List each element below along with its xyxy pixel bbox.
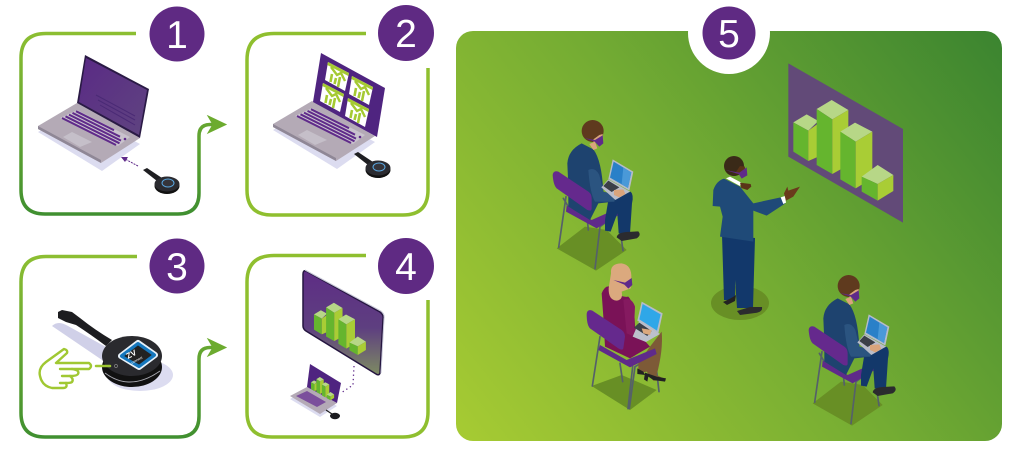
badge: step 2: 2 (395, 13, 417, 56)
badge: step 4 (378, 238, 434, 294)
arrow: dongle to laptop (121, 157, 138, 166)
panel outline: step 1 with arrow (21, 34, 226, 214)
person: seated man bottom right (809, 275, 896, 426)
badge: step 4: 4 (395, 246, 417, 289)
badge: step 2 (378, 5, 434, 61)
badge: step 3 (150, 238, 204, 294)
icon: pointing hand (40, 349, 110, 388)
logo on dongle: ZV (125, 348, 139, 361)
badge: step 1 (150, 6, 204, 62)
person: seated man top left (553, 120, 640, 271)
illustration: laptop showing dashboards (273, 53, 390, 178)
connection: dotted line (341, 366, 354, 393)
illustration: laptop with dongle (38, 55, 180, 194)
logo on dongle (121, 343, 155, 367)
panel outline: step 3 with arrow (21, 256, 226, 437)
illustration: small laptop with dongle (290, 364, 341, 419)
panel outline: step 4 (247, 256, 428, 437)
badge: step 5 (688, 0, 770, 74)
panel outline: step 2 (247, 34, 428, 215)
badge: step 5: 5 (718, 13, 740, 56)
badge: step 1: 1 (166, 14, 188, 57)
panel: step 5 meeting room (456, 31, 1002, 441)
illustration: large display with chart (303, 270, 384, 375)
person: presenter (711, 156, 800, 320)
illustration: dongle with pressing hand (40, 310, 173, 391)
badge: step 3: 3 (166, 246, 188, 289)
wall chart (788, 63, 903, 223)
person: seated woman (587, 263, 666, 410)
logo on dongle: connect (131, 356, 143, 365)
